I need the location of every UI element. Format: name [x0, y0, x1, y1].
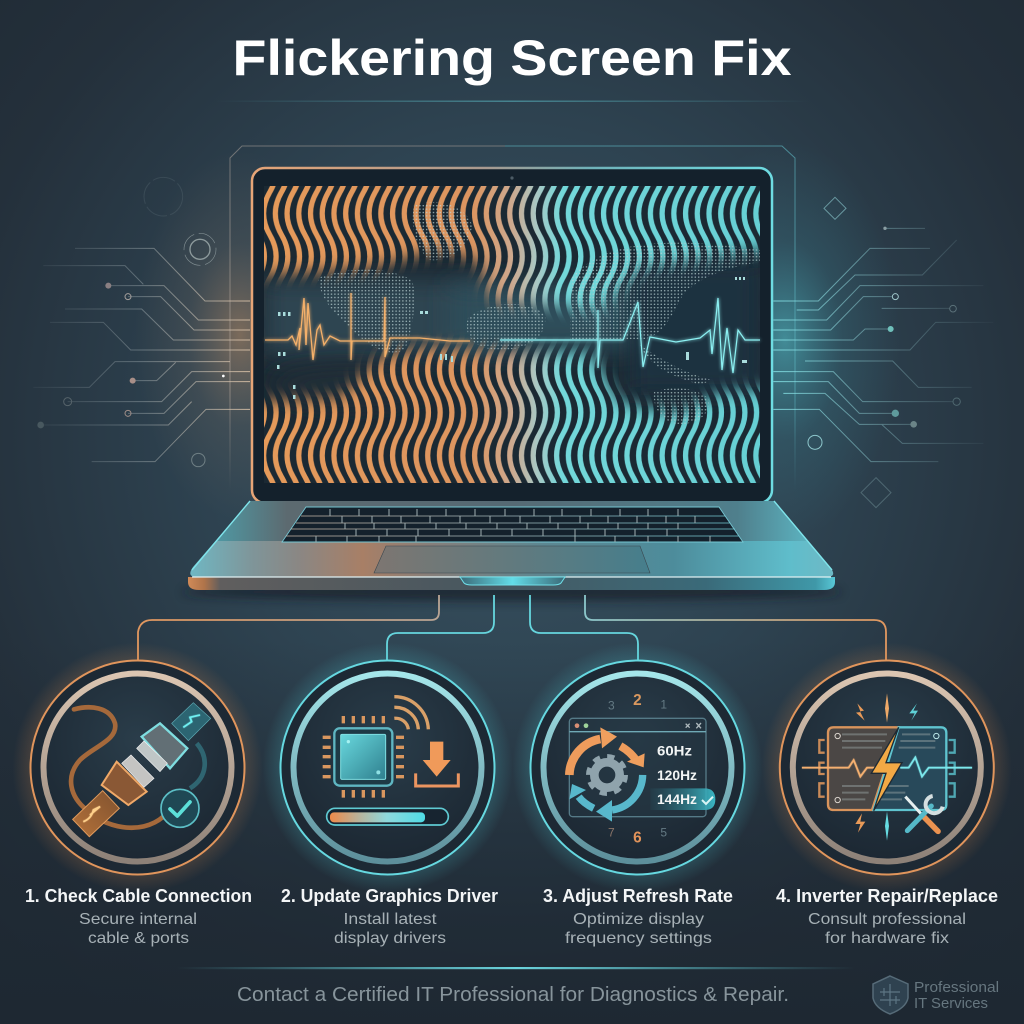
circuit frame around laptop: [230, 146, 795, 490]
step 2 caption: 2. Update Graphics Driver: [281, 886, 498, 906]
trackpad: [374, 546, 650, 573]
step 4 caption: [776, 886, 998, 947]
step 1 caption: [25, 886, 252, 947]
step 1 caption: Secure internal: [79, 911, 197, 928]
icon: inverter board with lightning and tools: [802, 693, 972, 841]
camera dot: [510, 176, 514, 180]
step 3: refresh rate icon circle: [512, 642, 762, 892]
clock numbers: 5: [660, 826, 667, 840]
connector to step 2: [387, 595, 494, 660]
dotted world map: [318, 202, 760, 424]
clock numbers: 2: [633, 692, 642, 709]
step 3 caption: [543, 886, 733, 947]
footer call to action: Contact a Certified IT Professional for Diagnostics & Repair.: [237, 984, 789, 1006]
step 4 caption: for hardware fix: [825, 930, 949, 947]
laptop base deck: [188, 501, 835, 590]
icon: settings window with refresh rates: [569, 692, 715, 846]
step 2 caption: Install latest: [344, 911, 437, 928]
step 3 caption: Optimize display: [573, 911, 704, 928]
logo text: IT Services: [914, 996, 988, 1012]
icon: cable and plugs: [71, 703, 211, 837]
heartbeat: cyan: [500, 298, 760, 373]
connector to step 4: [585, 595, 886, 660]
clock numbers: 6: [633, 829, 642, 846]
clock numbers: 1: [660, 698, 667, 712]
title underline: [215, 100, 810, 102]
front lip: [188, 577, 835, 590]
screen data specks: [277, 277, 747, 399]
step 3 caption: frequency settings: [565, 930, 712, 947]
rate labels: 144Hz: [657, 791, 697, 807]
step 3 caption: 3. Adjust Refresh Rate: [543, 886, 733, 906]
step 1 caption: 1. Check Cable Connection: [25, 886, 252, 906]
clock numbers: 3: [608, 698, 615, 712]
clock numbers: 7: [608, 826, 615, 840]
connector to step 3: [530, 595, 638, 660]
step 4 caption: 4. Inverter Repair/Replace: [776, 886, 998, 906]
connector lines: [138, 595, 886, 660]
title: Flickering Screen Fix: [232, 30, 792, 86]
rate labels: 60Hz: [657, 743, 692, 759]
step 2 caption: display drivers: [334, 930, 446, 947]
logo text: Professional: [914, 980, 999, 996]
rate labels: 120Hz: [657, 767, 697, 783]
screen underlay haze: [264, 242, 760, 420]
circuit traces: right: [773, 197, 993, 508]
footer divider: [176, 967, 856, 969]
connector to step 1: [138, 595, 439, 660]
clock numbers: [608, 692, 667, 846]
step 1: cable icon circle: [12, 642, 262, 892]
selected rate highlight: [650, 788, 715, 810]
front notch: [460, 577, 565, 585]
step 1 caption: cable & ports: [88, 930, 189, 947]
heartbeat: orange: [265, 293, 470, 360]
logo text: [914, 980, 999, 1012]
keyboard: [282, 507, 743, 542]
step 4 caption: Consult professional: [808, 911, 966, 928]
circuit traces: left: [33, 177, 250, 467]
rate labels: [657, 743, 697, 807]
icon: chip, download and progress bar: [323, 697, 458, 825]
laptop: [188, 168, 835, 590]
step 4: inverter icon circle: [762, 642, 1012, 892]
laptop lid with screen: [252, 168, 772, 503]
step 2: driver icon circle: [262, 642, 512, 892]
laptop shadow: [182, 583, 842, 601]
icon: shield logo: [873, 976, 908, 1014]
screen wave stripes: [264, 186, 760, 483]
step 2 caption: [281, 886, 498, 947]
